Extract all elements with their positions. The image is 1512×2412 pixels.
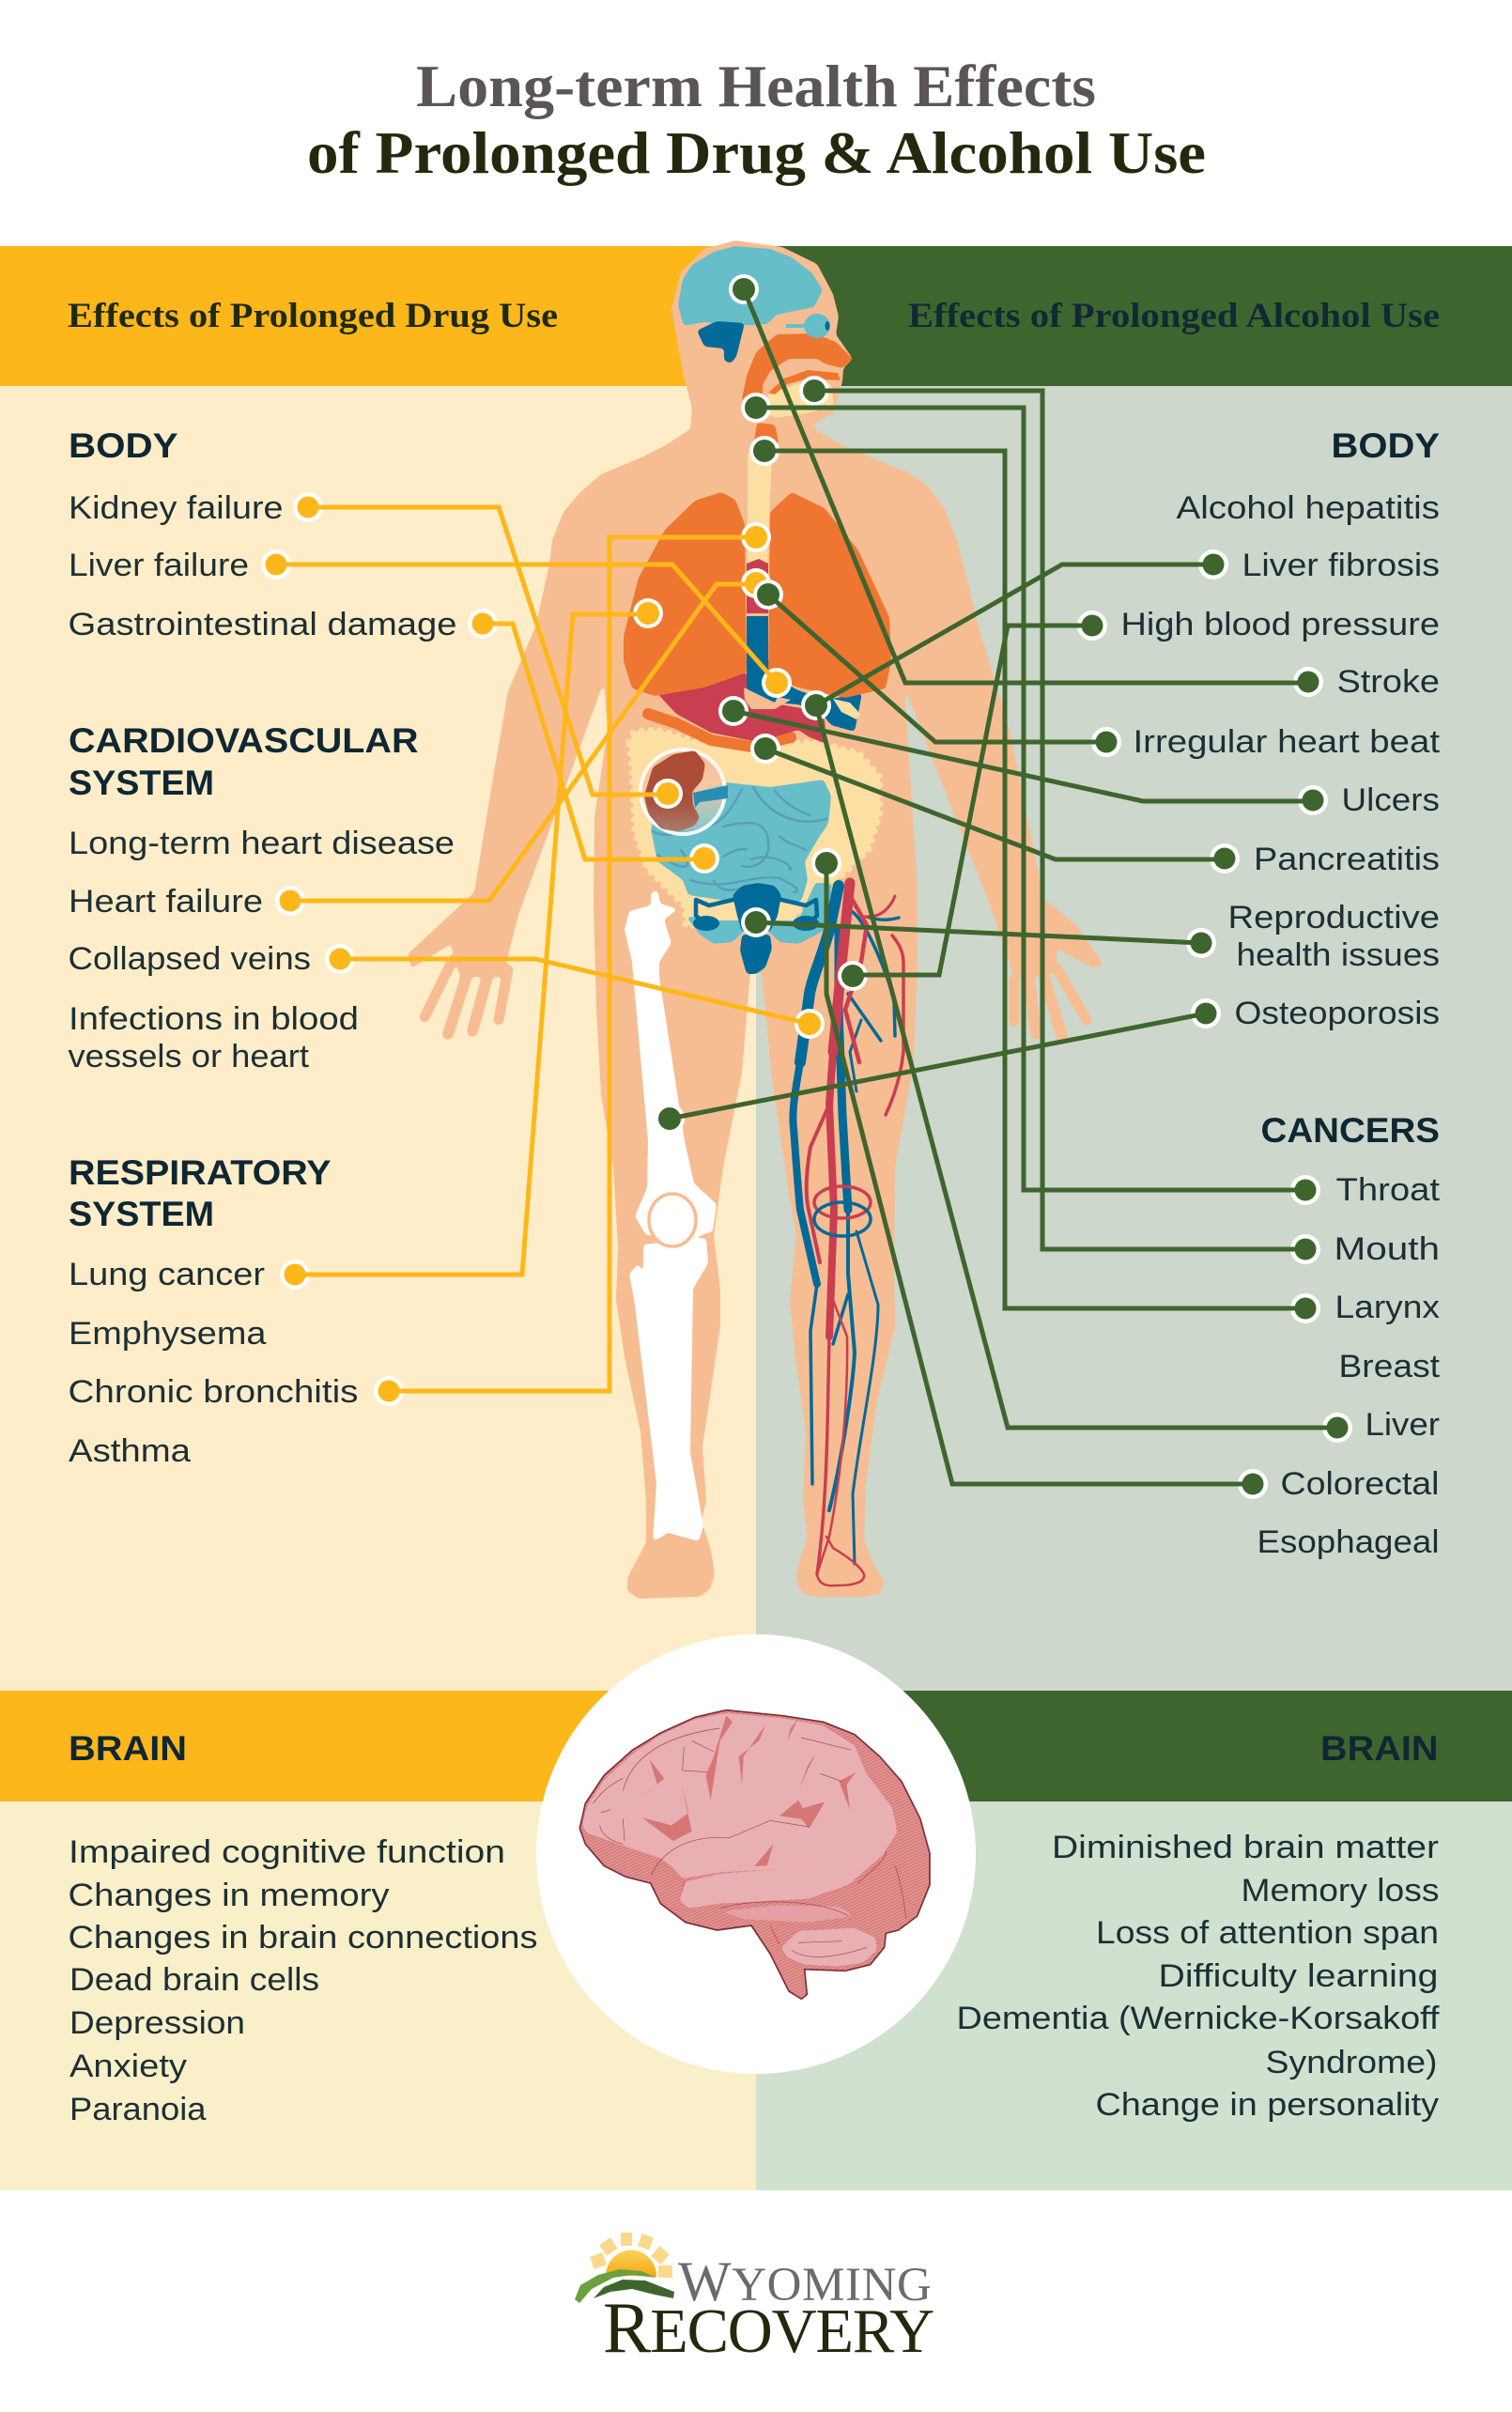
panel: alcohol body effects: Osteoporosis [1234,996,1440,1031]
lungs [624,492,891,698]
panel: alcohol brain effects: BRAIN [1320,1729,1439,1768]
throat [754,423,779,456]
panel: alcohol brain effects [756,1691,1512,2190]
panel: drug respiratory effects [68,1153,359,1469]
panel: alcohol brain effects: Diminished brain matter [1052,1830,1439,1865]
panel: drug respiratory effects: Asthma [69,1433,191,1469]
knee vessel rings [814,1186,871,1236]
pancreas [648,714,791,747]
knee cap [649,1194,696,1246]
panel: alcohol body effects: BODY [1332,426,1440,465]
panel: alcohol body effects: Ulcers [1341,782,1440,818]
trachea [748,454,772,564]
brain outline [579,1710,930,1999]
title [307,54,1206,186]
mouth [742,333,853,418]
panel: alcohol body effects: Stroke [1337,664,1440,700]
panel: alcohol cancers: Breast [1339,1349,1441,1384]
panel: drug brain effects: Changes in memory [68,1878,390,1913]
aorta tube [747,616,768,673]
leg bones [625,889,717,1541]
panel: alcohol cancers: CANCERS [1260,1111,1440,1150]
panel: drug cardiovascular effects: vessels or heart [68,1039,310,1075]
heart [747,559,768,613]
panel: drug brain effects: Changes in brain connections [68,1920,537,1956]
panel: drug body effects: BODY [69,426,178,465]
panel: drug cardiovascular effects: CARDIOVASCULAR [69,721,419,760]
panel: drug brain effects: BRAIN [69,1729,187,1768]
panel: alcohol cancers: Liver [1365,1407,1440,1443]
header band: alcohol use [756,246,1512,386]
panel: alcohol body effects: Liver fibrosis [1242,548,1440,583]
connectors: alcohol effects [655,274,1352,1499]
panel: alcohol cancers: Throat [1335,1172,1441,1208]
sulci lines [594,1728,906,1956]
target dot rings: alcohol [655,274,1352,1499]
panel: alcohol cancers [1257,1111,1441,1560]
panel: alcohol brain effects: Dementia (Wernicke-Korsakoff [956,2001,1440,2036]
panel: drug brain effects: Paranoia [69,2092,207,2127]
logo: Wyoming Recovery [575,2233,933,2368]
panel: drug body effects: Gastrointestinal damage [68,607,456,642]
header band: drug use: Effects of Prolonged Drug Use [68,297,558,335]
panel: alcohol brain effects: Syndrome) [1266,2045,1437,2080]
panel: alcohol brain effects: Change in personality [1095,2087,1439,2123]
small intestine [651,780,831,902]
body silhouette [408,240,1103,1599]
icon: brain illustration [579,1710,930,1999]
large intestine [629,730,880,925]
cerebellum [697,321,745,363]
target dot centres: drug [265,496,821,1401]
header band: drug use [0,246,756,386]
panel: alcohol brain effects: Memory loss [1242,1873,1439,1909]
icon: sun [606,2250,656,2277]
panel: alcohol body effects: Reproductive [1228,900,1440,935]
target dot rings: drug [261,492,825,1406]
panel: drug respiratory effects: Emphysema [69,1316,267,1352]
stomach [744,657,862,732]
panel: drug brain effects: Anxiety [69,2049,187,2084]
panel: drug cardiovascular effects: Long-term heart disease [69,826,455,861]
panel: drug cardiovascular effects: Heart failure [69,884,263,920]
blood vessels [793,883,903,1585]
panel: drug cardiovascular effects: SYSTEM [69,764,214,802]
upper cortex [582,1713,897,1879]
human body figure [408,240,1103,1599]
panel: drug cardiovascular effects: Infections in blood [69,1001,359,1037]
eye [786,314,830,338]
panel: alcohol body effects [1121,426,1441,1031]
panel: drug body effects [68,426,456,642]
white brain circle [536,1634,976,2074]
panel: drug cardiovascular effects: Collapsed veins [68,941,311,977]
sulci shading [639,1716,856,1900]
panel: drug brain effects [0,1691,756,2190]
icon: sun rays [590,2233,672,2278]
panel: drug brain effects: Dead brain cells [69,1962,319,1998]
lower pelvis [686,883,831,944]
panel: alcohol cancers: Colorectal [1281,1466,1439,1502]
panel: drug respiratory effects: Lung cancer [69,1257,265,1292]
leader lines: alcohol [670,289,1337,1484]
panel: drug brain effects: Impaired cognitive function [69,1834,505,1870]
panel: drug respiratory effects: Chronic bronchitis [68,1374,359,1410]
panel: drug body effects: Liver failure [69,548,249,583]
target dot centres: alcohol [658,278,1349,1495]
background: alcohol side [756,386,1512,1691]
panel: alcohol body effects: Pancreatitis [1254,842,1440,877]
title: of Prolonged Drug & Alcohol Use [307,120,1206,186]
panel: alcohol cancers: Esophageal [1257,1524,1439,1560]
panel: drug brain effects: Depression [69,2005,245,2041]
icon: light green hill [575,2269,656,2303]
panel: drug body effects: Kidney failure [69,490,284,526]
uterus [693,883,819,974]
panel: alcohol body effects: High blood pressure [1121,607,1440,642]
panel: drug respiratory effects: SYSTEM [69,1195,214,1233]
background: drug side [0,386,756,1691]
panel: alcohol cancers: Larynx [1335,1290,1440,1325]
brain in head [678,246,823,326]
panel: alcohol cancers: Mouth [1334,1231,1440,1267]
liver [655,672,826,744]
lower temporal gyrus [679,1825,899,1909]
leader lines: drug [276,507,810,1391]
kidney inset [640,750,728,834]
panel: alcohol body effects: health issues [1236,937,1440,973]
connectors: drug effects [261,492,825,1406]
header band: alcohol use: Effects of Prolonged Alcohol Use [908,297,1440,335]
panel: drug cardiovascular effects [68,721,455,1075]
icon: dark green hill [594,2280,674,2298]
wordmark: WYOMING [678,2250,932,2312]
cerebellum [781,1928,876,1966]
panel: alcohol body effects: Irregular heart beat [1133,724,1441,760]
panel: drug respiratory effects: RESPIRATORY [69,1153,332,1192]
title: Long-term Health Effects [416,54,1096,119]
logo: Wyoming Recovery: RECOVERY [603,2287,933,2368]
panel: alcohol brain effects: Difficulty learning [1159,1958,1439,1994]
panel: alcohol brain effects: Loss of attention span [1096,1915,1439,1951]
panel: alcohol body effects: Alcohol hepatitis [1176,490,1440,526]
